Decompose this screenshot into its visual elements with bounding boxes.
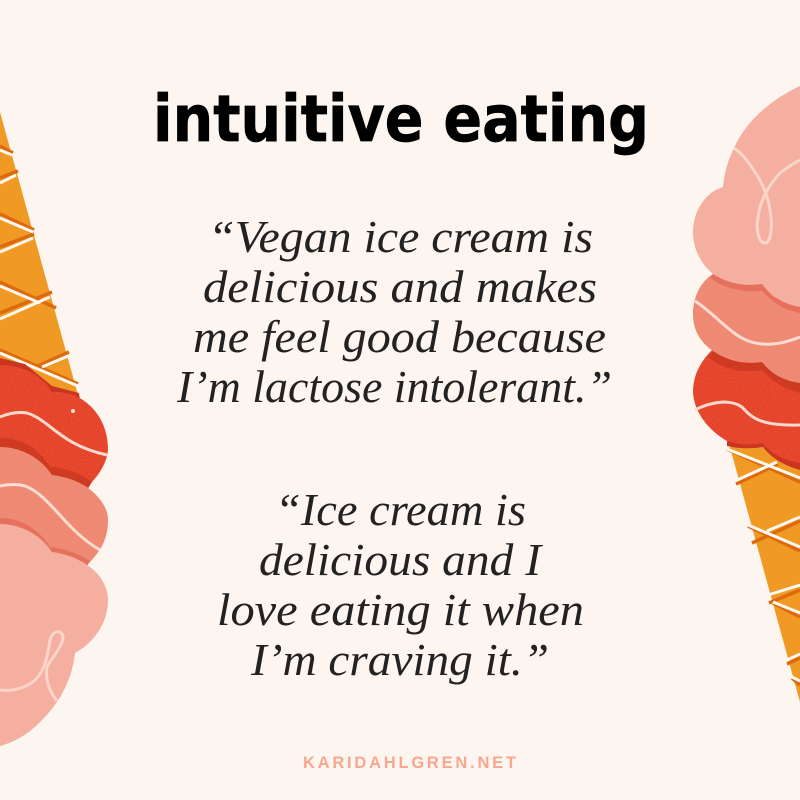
left scoop: red [0,358,108,500]
quote: craving ice cream [217,484,584,685]
quote: craving ice cream: “Ice cream is [275,484,526,535]
quote: craving ice cream: love eating it when [217,584,584,635]
left cone [0,112,78,400]
right scoop: red [693,340,800,470]
left scoop: medium coral [0,447,108,580]
quote: vegan ice cream [176,211,612,412]
right cone [727,440,800,702]
title: intuitive eating [153,83,649,157]
left scoop: light pink [0,524,108,746]
right scoop: medium coral [693,260,800,383]
right scoop: light pink [693,86,800,307]
quote: vegan ice cream: me feel good because [193,311,606,362]
left ice cream cone illustration [0,112,108,746]
quote: craving ice cream: delicious and I [259,534,544,585]
quote: vegan ice cream: I’m lactose intolerant.” [176,361,612,412]
footer website: KARIDAHLGREN.NET [303,754,516,772]
quote: craving ice cream: I’m craving it.” [250,634,549,685]
quote: vegan ice cream: “Vegan ice cream is [208,211,593,262]
right ice cream cone illustration [693,86,800,702]
quote: vegan ice cream: delicious and makes [203,261,597,312]
